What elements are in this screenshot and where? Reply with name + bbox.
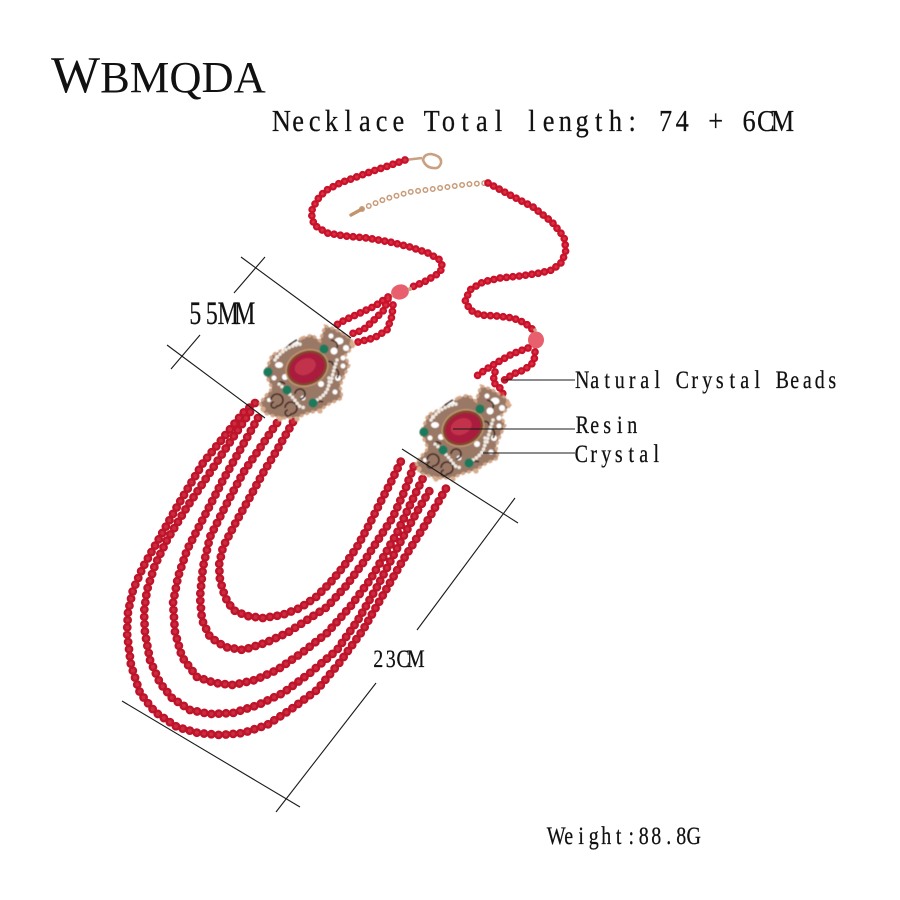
callout: natural crystal beads: Natural Crystal Beads — [575, 366, 836, 394]
right upper tassel — [474, 348, 535, 394]
title: WBMQDA — [51, 47, 266, 104]
callout: crystal: Crystal — [575, 440, 659, 468]
beaded strand 4 — [144, 412, 433, 714]
chain extender — [351, 183, 486, 215]
beaded strand 3 — [173, 418, 423, 685]
right neck strand — [465, 183, 566, 329]
beaded strand 1 (innermost) — [219, 422, 403, 618]
left pendant — [260, 326, 355, 422]
left upper tassel — [333, 297, 393, 342]
beaded strand 5 (outermost) — [127, 403, 448, 735]
weight label: Weight:88.8G — [547, 822, 701, 850]
callout: resin: Resin — [576, 411, 637, 439]
left spacer bead — [389, 282, 412, 302]
beaded strand 2 — [200, 423, 415, 650]
dimension: 23CM — [122, 449, 518, 812]
right spacer bead — [528, 328, 544, 348]
clasp — [405, 154, 441, 168]
dimension: 55MM: 55MM — [189, 295, 255, 332]
dimension: 23CM: 23CM — [373, 645, 425, 673]
left neck strand — [311, 160, 443, 287]
subtitle: necklace total length: Necklace Total length: 74 + 6CM — [272, 104, 794, 139]
dimension: 55MM — [167, 257, 351, 418]
right pendant — [416, 386, 511, 482]
